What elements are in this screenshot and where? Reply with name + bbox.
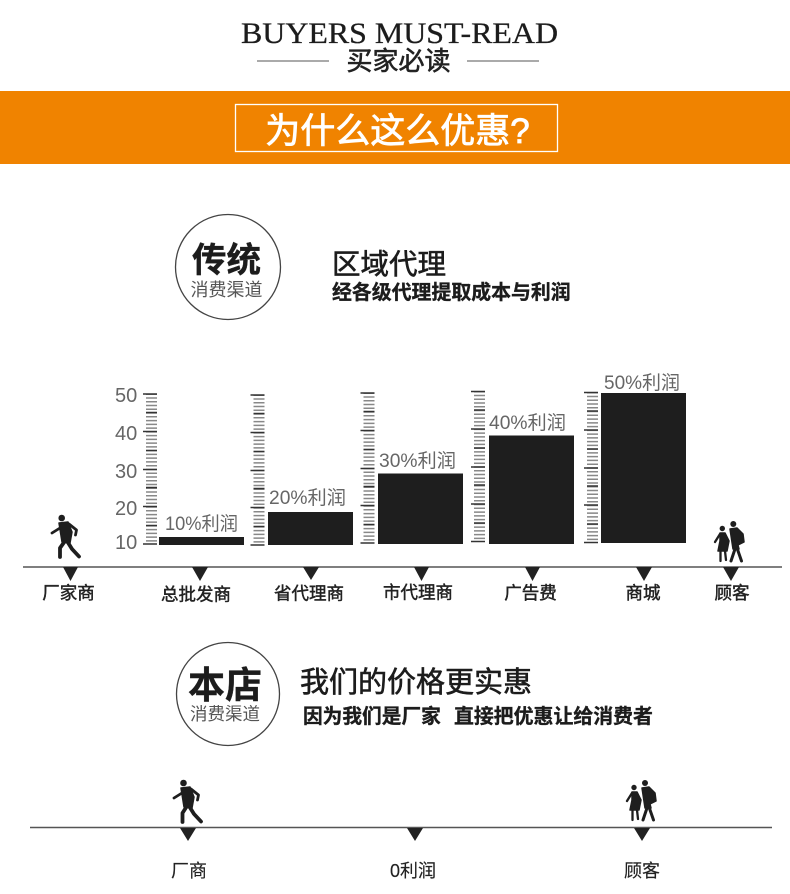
- stage labels: 厂商: [171, 861, 207, 881]
- title: BUYERS MUST-READ: [241, 17, 558, 50]
- bar: 10%: 10%利润: [165, 513, 238, 535]
- heading: better price: 因为我们是厂家: [303, 705, 441, 728]
- banner: 为什么这么优惠?: [265, 112, 530, 151]
- stage labels: 0利润: [390, 861, 436, 881]
- bar: 30%: 30%利润: [379, 450, 456, 472]
- stage labels: 总批发商: [161, 584, 231, 604]
- title: 买家必读: [346, 46, 451, 76]
- icon: manufacturer walking: [52, 515, 79, 557]
- axis numbers: [115, 385, 137, 554]
- bar: 40%: 40%利润: [489, 412, 566, 434]
- banner: [0, 91, 790, 164]
- ruler 2: [250, 394, 264, 546]
- stage labels: 顾客: [624, 861, 660, 881]
- icon: customers walking: [715, 521, 744, 561]
- title: [241, 17, 558, 76]
- heading: regional agents: [332, 249, 571, 304]
- stage labels: [42, 582, 750, 604]
- stage labels: 省代理商: [274, 584, 344, 604]
- heading: regional agents: 经各级代理提取成本与利润: [332, 280, 571, 304]
- badge: traditional channel: 传统: [192, 242, 261, 280]
- timeline: our store: [30, 828, 772, 881]
- bar: 20%: [268, 487, 353, 545]
- badge: traditional channel: 消费渠道: [190, 280, 262, 300]
- ruler 1: [143, 394, 157, 544]
- heading: regional agents: 区域代理: [332, 249, 446, 281]
- timeline: traditional channel: [23, 567, 782, 604]
- ruler 4: [471, 391, 485, 542]
- ruler 5: [584, 392, 598, 543]
- bar: 30%: [378, 450, 463, 544]
- bar: 50%: [601, 372, 686, 543]
- axis numbers: 40: [115, 423, 137, 445]
- badge: our store: [176, 642, 280, 746]
- axis numbers: 20: [115, 498, 137, 520]
- bar: 20%: 20%利润: [269, 487, 346, 509]
- stage labels: 厂家商: [42, 583, 95, 603]
- stage labels: 顾客: [714, 583, 750, 603]
- axis numbers: 50: [115, 385, 137, 407]
- icon: customers walking: [627, 780, 656, 820]
- badge: traditional channel: [176, 214, 280, 320]
- bar: 10%: [159, 513, 244, 545]
- icon: manufacturer walking: [174, 780, 201, 822]
- stage labels: 市代理商: [383, 582, 453, 602]
- stage labels: [171, 861, 660, 881]
- bar: 40%: [489, 412, 574, 544]
- badge: our store: 本店: [188, 665, 262, 706]
- axis numbers: 10: [115, 532, 137, 554]
- heading: better price: 我们的价格更实惠: [300, 666, 532, 699]
- ruler 3: [360, 392, 374, 544]
- badge: our store: 消费渠道: [190, 704, 260, 724]
- axis numbers: 30: [115, 461, 137, 483]
- stage labels: 商城: [626, 583, 660, 603]
- heading: better price: 直接把优惠让给消费者: [454, 705, 653, 728]
- heading: better price: [300, 666, 653, 728]
- bar: 50%: 50%利润: [604, 372, 680, 394]
- bar chart: profit by channel: [115, 372, 686, 554]
- stage labels: 广告费: [504, 583, 557, 603]
